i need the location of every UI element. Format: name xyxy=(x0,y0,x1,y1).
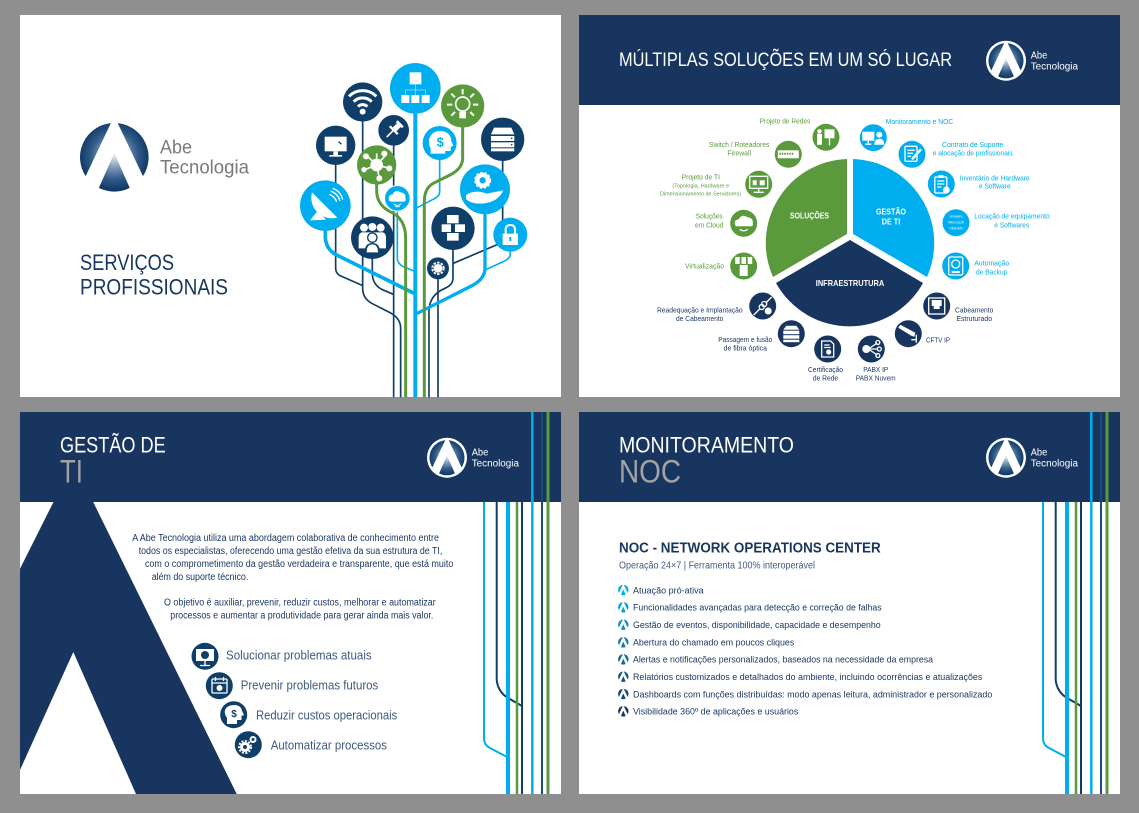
tree branches xyxy=(325,88,510,397)
item: prevenir problemas: Prevenir problemas futuros xyxy=(241,678,378,692)
label: contrato: e alocação de profissionais xyxy=(933,148,1013,157)
logo: Abe Tecnologia: Tecnologia xyxy=(160,158,249,179)
icon: backup xyxy=(942,252,969,280)
label: readequação: de Cabeamento xyxy=(676,314,723,323)
icon: monitoramento xyxy=(860,124,887,151)
label: locação: Locação de equipamento xyxy=(974,211,1050,220)
item: reduzir custos: $ xyxy=(231,709,237,720)
heading: monitoramento NOC xyxy=(619,433,794,489)
feature 7: Dashboards com funções distribuídas: modo apenas leitura, administrador e personalizado xyxy=(633,689,992,700)
label: readequação: Readequação e Implantação xyxy=(657,305,743,314)
label: contrato xyxy=(933,140,1013,157)
intro text: O objetivo é auxiliar, prevenir, reduzir custos, melhorar e automatizar xyxy=(164,598,436,608)
intro text: com o comprometimento da gestão verdadeira e transparente, que está muito xyxy=(145,559,454,570)
icon: CFTV xyxy=(895,320,922,347)
heading: gestão de TI: GESTÃO DE xyxy=(60,433,166,458)
item: solucionar problemas xyxy=(192,643,372,670)
label: backup: Automação xyxy=(974,259,1009,268)
label: projeto de redes: Projeto de Redes xyxy=(760,117,811,126)
label: inventário xyxy=(960,173,1030,191)
label: passagem xyxy=(718,335,772,353)
heading: serviços profissionais xyxy=(80,250,228,299)
icon: cloud xyxy=(384,185,411,212)
logo: header: Abe xyxy=(1031,448,1048,459)
logo: header xyxy=(986,41,1078,81)
label: backup xyxy=(974,259,1009,276)
icon: wifi xyxy=(343,82,382,122)
intro text: processos e aumentar a produtividade para gerar ainda mais valor. xyxy=(170,610,433,622)
header band xyxy=(579,15,1120,105)
feature 5: Alertas e notificações personalizados, baseados na necessidade da empresa xyxy=(633,655,934,666)
item: solucionar problemas: Solucionar problemas atuais xyxy=(226,648,372,662)
icon: hand holding gear xyxy=(460,164,510,214)
icon: satellite dish xyxy=(300,180,351,231)
logo: header: Tecnologia xyxy=(1031,61,1078,72)
heading: serviços profissionais: PROFISSIONAIS xyxy=(80,274,228,299)
item: automatizar processos: Automatizar processos xyxy=(271,738,387,752)
label: cabeamento estruturado: Cabeamento xyxy=(955,305,993,314)
feature 1: Atuação pró-ativa xyxy=(633,585,704,596)
pie labels: INFRAESTRUTURA xyxy=(816,278,884,288)
icon: team xyxy=(351,216,394,259)
label: passagem: de fibra óptica xyxy=(724,344,768,353)
icon: padlock xyxy=(493,218,527,252)
label: passagem: Passagem e fusão xyxy=(718,335,772,344)
intro text: A Abe Tecnologia utiliza uma abordagem colaborativa de conhecimento entre xyxy=(132,533,439,544)
icon: puzzle gear xyxy=(427,257,449,279)
heading: monitoramento NOC: MONITORAMENTO xyxy=(619,433,794,458)
icon: readequação de cabeamento xyxy=(749,292,776,320)
icon: certificação xyxy=(814,336,841,362)
panel: monitoramento NOC xyxy=(579,412,1120,794)
icon: switch xyxy=(775,141,802,168)
icon: network hub xyxy=(357,145,396,185)
label: backup: de Backup xyxy=(976,267,1007,276)
item: reduzir custos: Reduzir custos operacionais xyxy=(256,708,397,722)
icon: projeto de redes xyxy=(812,124,840,151)
label: projeto de TI xyxy=(660,172,741,198)
label: switch xyxy=(709,140,770,157)
circuit lines xyxy=(1043,412,1107,794)
icon: locação: Microsoft xyxy=(948,221,965,225)
pie labels xyxy=(790,206,906,288)
heading: serviços profissionais: SERVIÇOS xyxy=(80,250,174,275)
pie labels: GESTÃO xyxy=(876,206,906,216)
technology tree illustration xyxy=(300,63,527,397)
label: locação xyxy=(974,211,1050,229)
label: projeto de TI: Dimensionamento de Servidores) xyxy=(660,192,741,198)
icon: projeto de TI xyxy=(745,171,772,198)
intro text xyxy=(132,533,454,622)
logo: Abe Tecnologia: Abe xyxy=(160,137,192,158)
icon: locação: vmware xyxy=(949,215,963,219)
label: soluções em cloud xyxy=(695,211,723,229)
icon: cabeamento estruturado xyxy=(923,292,950,320)
label: projeto de TI: (Topologia, Hardware e xyxy=(672,183,729,189)
logo: header xyxy=(986,438,1078,478)
icon: flowchart xyxy=(431,207,475,250)
heading: gestão de TI: TI xyxy=(60,453,83,489)
panel: múltiplas soluções xyxy=(579,15,1120,397)
logo: header: Abe xyxy=(472,448,489,459)
label: locação: e Softwares xyxy=(994,220,1030,229)
label: PABX: PABX IP xyxy=(863,365,888,374)
icon: server xyxy=(481,118,524,161)
panel: gestão de TI xyxy=(20,412,561,794)
icon: contrato xyxy=(898,141,926,168)
feature 3: Gestão de eventos, disponibilidade, capacidade e desempenho xyxy=(633,620,881,631)
item: automatizar processos xyxy=(235,731,387,758)
icon: org chart xyxy=(390,63,441,114)
label: CFTV: CFTV IP xyxy=(926,335,950,344)
NOC subtitle: Operação 24×7 | Ferramenta 100% interoperável xyxy=(619,559,815,571)
label: virtualização: Virtualização xyxy=(685,261,724,270)
heading: monitoramento NOC: NOC xyxy=(619,453,681,489)
item: reduzir custos xyxy=(220,701,397,728)
label: certificação xyxy=(808,365,843,383)
icon: soluções em cloud xyxy=(730,210,757,237)
label: inventário: Inventário de Hardware xyxy=(960,173,1030,182)
header band xyxy=(20,412,561,502)
icon: head with dollar sign: $ xyxy=(437,136,444,150)
icon: locação: VEEAM xyxy=(949,227,963,231)
icon: virtualização xyxy=(730,252,757,280)
NOC title: NOC - NETWORK OPERATIONS CENTER xyxy=(619,540,881,556)
icon: PABX xyxy=(858,336,885,362)
logo: header xyxy=(427,438,519,478)
pie chart: service areas xyxy=(766,159,934,326)
feature 4: Abertura do chamado em poucos cliques xyxy=(633,637,794,648)
label: readequação xyxy=(657,305,743,323)
feature 2: Funcionalidades avançadas para detecção e correção de falhas xyxy=(633,603,882,614)
label: soluções em cloud: em Cloud xyxy=(695,220,723,229)
icon: head with dollar sign xyxy=(423,126,457,160)
feature 6: Relatórios customizados e detalhados do ambiente, incluindo ocorrências e atualizações xyxy=(633,672,982,683)
icon: passagem de fibra xyxy=(778,320,805,347)
feature 8: Visibilidade 360º de aplicações e usuários xyxy=(633,707,798,718)
slice: gestão de TI xyxy=(853,159,934,277)
circuit lines xyxy=(484,412,548,794)
panel: serviços profissionais xyxy=(20,15,561,397)
pie labels: SOLUÇÕES xyxy=(790,210,829,220)
feature list xyxy=(618,584,992,718)
label: PABX: PABX Nuvem xyxy=(856,374,896,383)
label: certificação: Certificação xyxy=(808,365,843,374)
icon: inventário xyxy=(928,170,955,198)
logo: header: Tecnologia xyxy=(472,458,519,469)
label: contrato: Contrato de Suporte xyxy=(942,140,1003,149)
logo: header: Tecnologia xyxy=(1031,458,1078,469)
label: switch: Switch / Roteadores xyxy=(709,140,770,149)
item: prevenir problemas xyxy=(206,672,378,699)
label: projeto de TI: Projeto de TI xyxy=(682,172,720,181)
intro text: todos os especialistas, oferecendo uma gestão efetiva da sua estrutura de TI, xyxy=(139,546,442,557)
intro text: além do suporte técnico. xyxy=(152,572,248,583)
logo: header: Abe xyxy=(1031,51,1048,62)
label: monitoramento: Monitoramento e NOC xyxy=(886,117,954,126)
heading: múltiplas soluções: MÚLTIPLAS SOLUÇÕES EM UM SÓ LUGAR xyxy=(619,49,952,71)
heading: gestão de TI xyxy=(60,433,166,489)
label: cabeamento estruturado xyxy=(955,305,993,323)
pie labels: DE TI xyxy=(882,217,900,227)
icon: pin xyxy=(378,115,409,146)
label: switch: Firewall xyxy=(727,148,751,157)
label: certificação: de Rede xyxy=(813,374,838,383)
label: soluções em cloud: Soluções xyxy=(696,211,723,220)
icon: light bulb xyxy=(441,84,484,128)
slice: soluções xyxy=(766,159,847,277)
icon: locação xyxy=(942,209,970,236)
logo: Abe Tecnologia xyxy=(80,123,249,192)
large A shape xyxy=(20,501,237,794)
label: cabeamento estruturado: Estruturado xyxy=(956,314,992,323)
label: inventário: e Software xyxy=(979,182,1011,191)
label: PABX xyxy=(856,365,896,383)
header band xyxy=(579,412,1120,502)
icon: monitor xyxy=(316,126,355,165)
slice: infraestrutura xyxy=(776,240,923,326)
